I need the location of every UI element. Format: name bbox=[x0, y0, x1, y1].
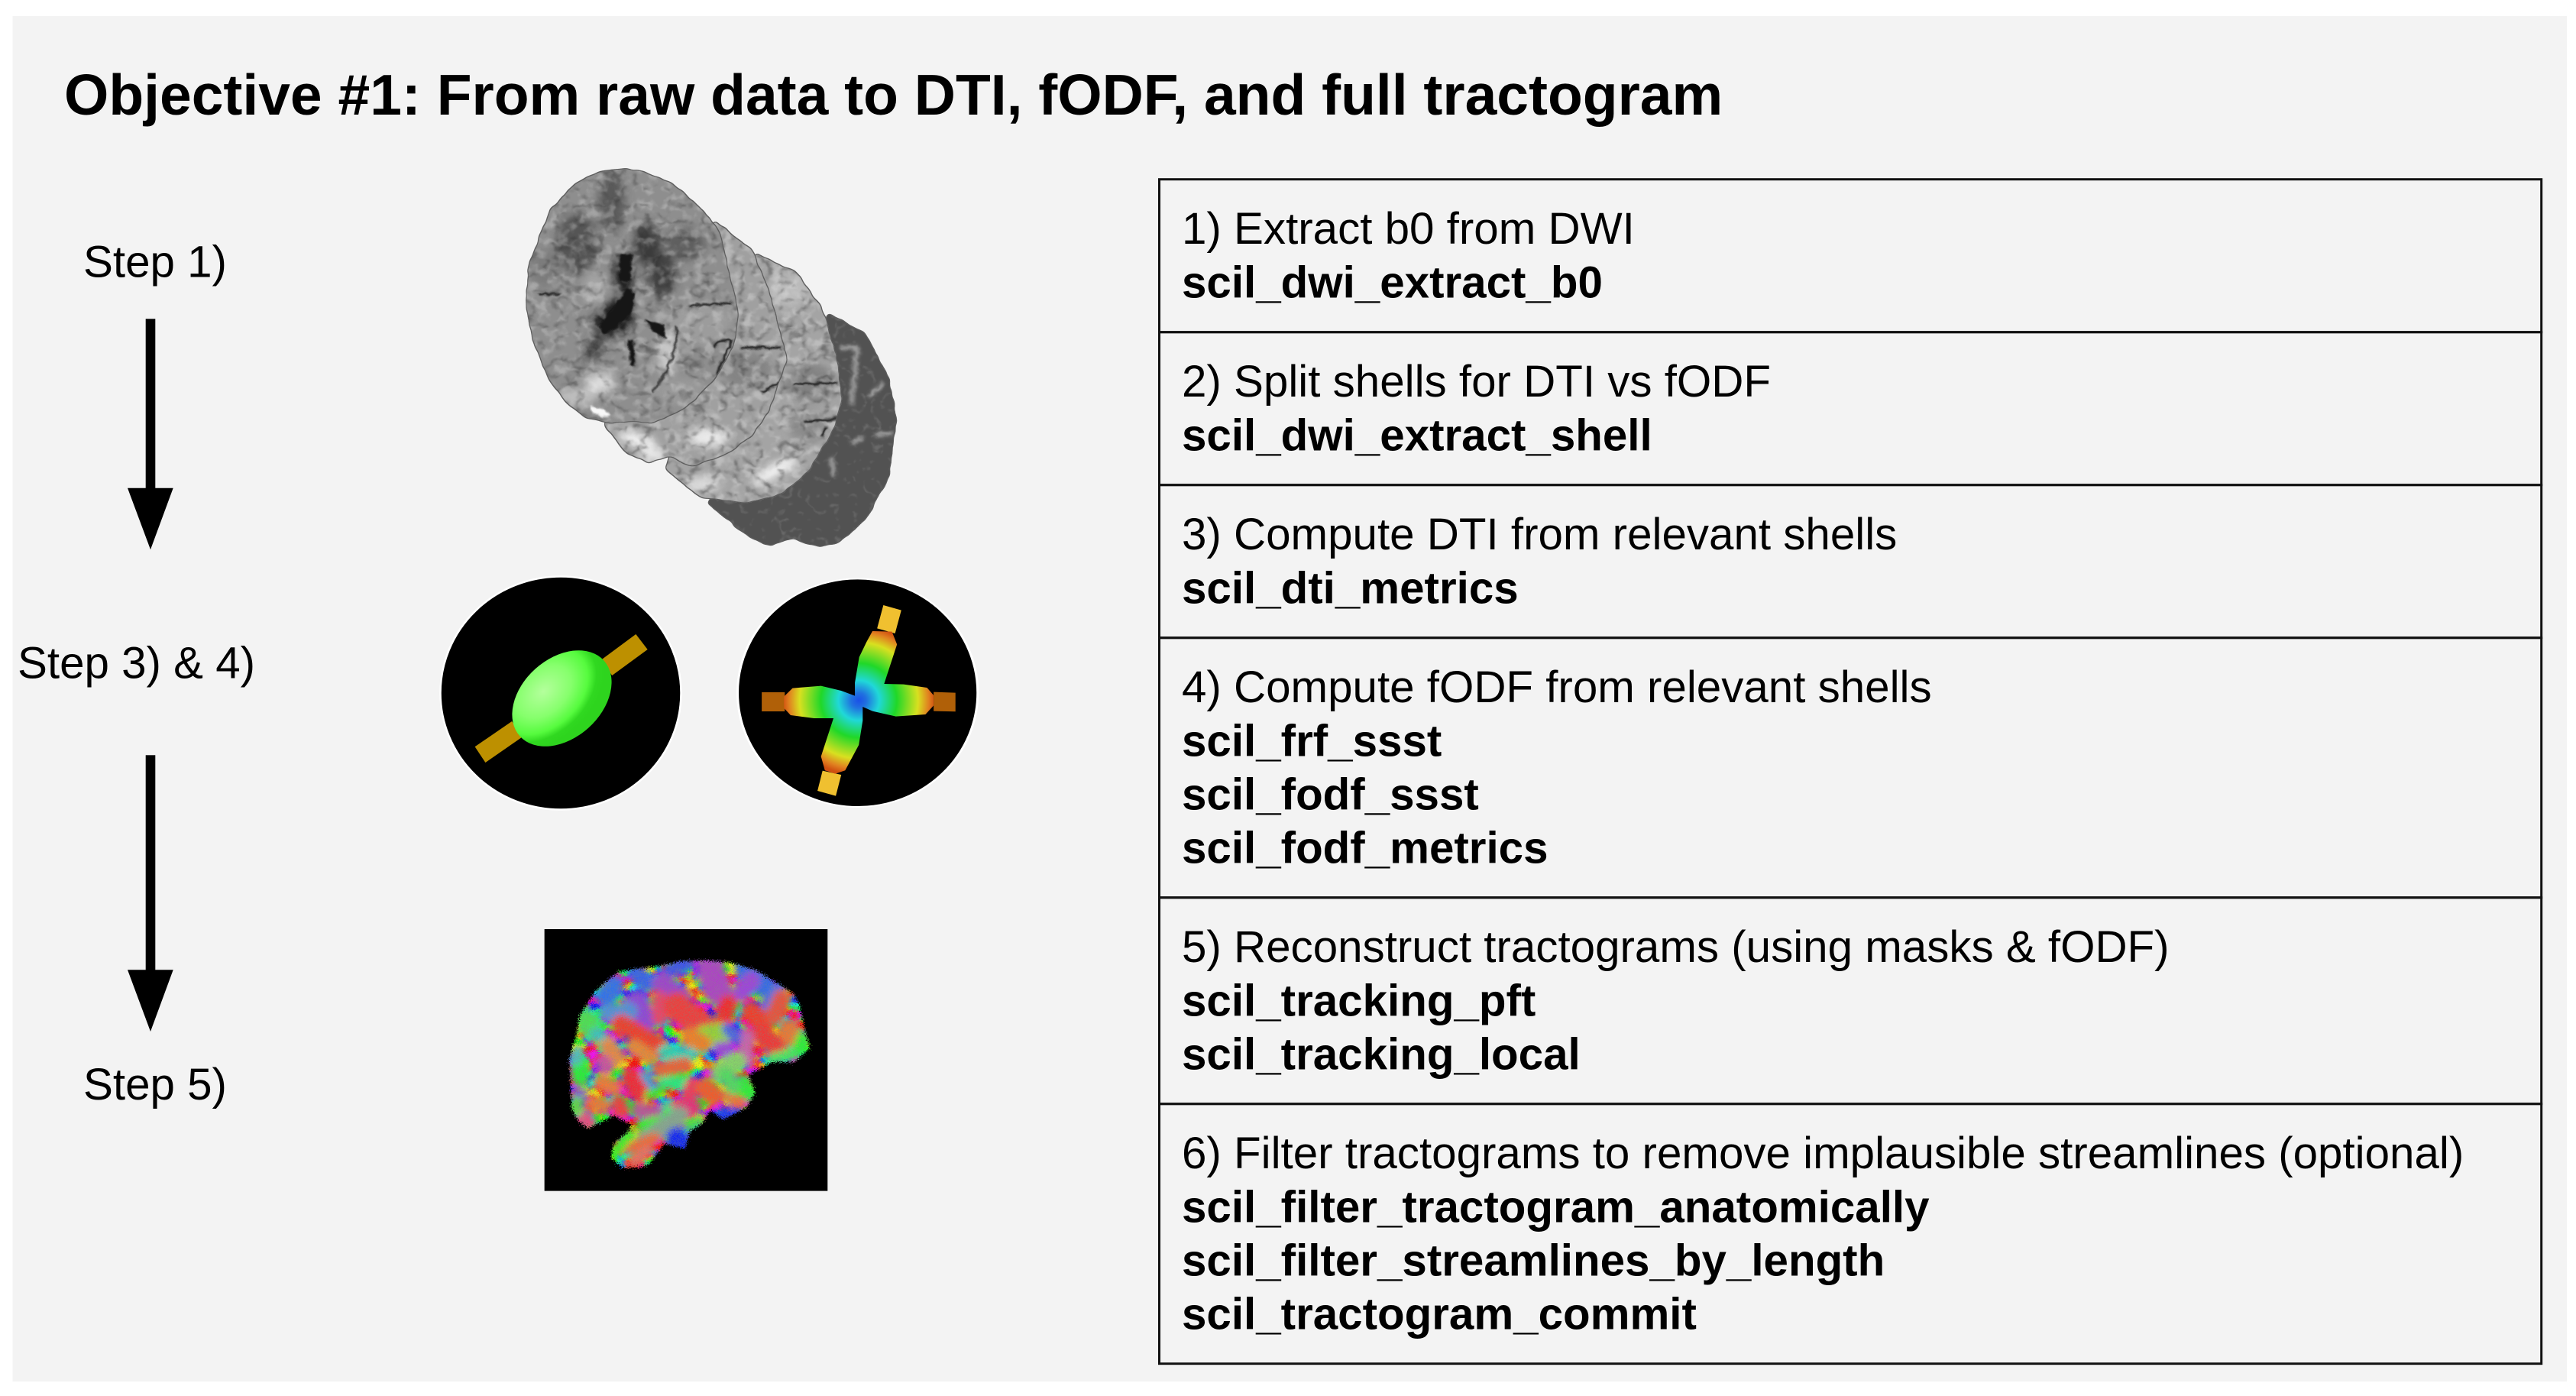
table row 5: scil_tracking_local bbox=[1182, 1030, 1581, 1079]
arrow: step 1 to step 3 and 4 bbox=[128, 319, 173, 549]
table row 6: scil_filter_streamlines_by_length bbox=[1182, 1236, 1885, 1285]
table row 4: scil_fodf_ssst bbox=[1182, 770, 1479, 819]
label: step 3 and 4: Step 3) & 4) bbox=[18, 639, 255, 688]
table row 1: scil_dwi_extract_b0 bbox=[1182, 258, 1603, 307]
table row 6: scil_tractogram_commit bbox=[1182, 1290, 1697, 1339]
icon: fODF glyph bbox=[738, 578, 978, 807]
image: stacked grayscale brain slices bbox=[521, 165, 913, 561]
table row 2 bbox=[1160, 332, 2542, 485]
table row 4: 4) Compute fODF from relevant shells bbox=[1182, 662, 1932, 712]
table row 1 bbox=[1160, 180, 2542, 332]
arrow: step 3 and 4 to step 5 bbox=[128, 755, 173, 1032]
table row 3: 3) Compute DTI from relevant shells bbox=[1182, 510, 1897, 559]
table row 5: scil_tracking_pft bbox=[1182, 977, 1536, 1025]
table row 6 bbox=[1160, 1104, 2542, 1364]
table row 1: 1) Extract b0 from DWI bbox=[1182, 204, 1635, 254]
image: colored tractogram bbox=[545, 929, 827, 1191]
label: step 5: Step 5) bbox=[83, 1060, 227, 1109]
table row 3: scil_dti_metrics bbox=[1182, 564, 1519, 613]
table: command steps bbox=[1160, 180, 2542, 1364]
table row 6: scil_filter_tractogram_anatomically bbox=[1182, 1183, 1930, 1232]
icon: DTI tensor glyph bbox=[440, 576, 681, 810]
table row 4: scil_fodf_metrics bbox=[1182, 824, 1549, 873]
table row 2: 2) Split shells for DTI vs fODF bbox=[1182, 357, 1771, 406]
label: step 1: Step 1) bbox=[83, 237, 227, 287]
table row 2: scil_dwi_extract_shell bbox=[1182, 411, 1652, 460]
table row 5 bbox=[1160, 898, 2542, 1104]
table row 3 bbox=[1160, 485, 2542, 638]
table row 5: 5) Reconstruct tractograms (using masks & fODF) bbox=[1182, 922, 2170, 972]
table row 4: scil_frf_ssst bbox=[1182, 717, 1442, 766]
title: Objective #1: From raw data to DTI, fODF, and full tractogram bbox=[64, 63, 1723, 127]
table row 4 bbox=[1160, 638, 2542, 898]
table row 6: 6) Filter tractograms to remove implausible streamlines (optional) bbox=[1182, 1129, 2464, 1178]
